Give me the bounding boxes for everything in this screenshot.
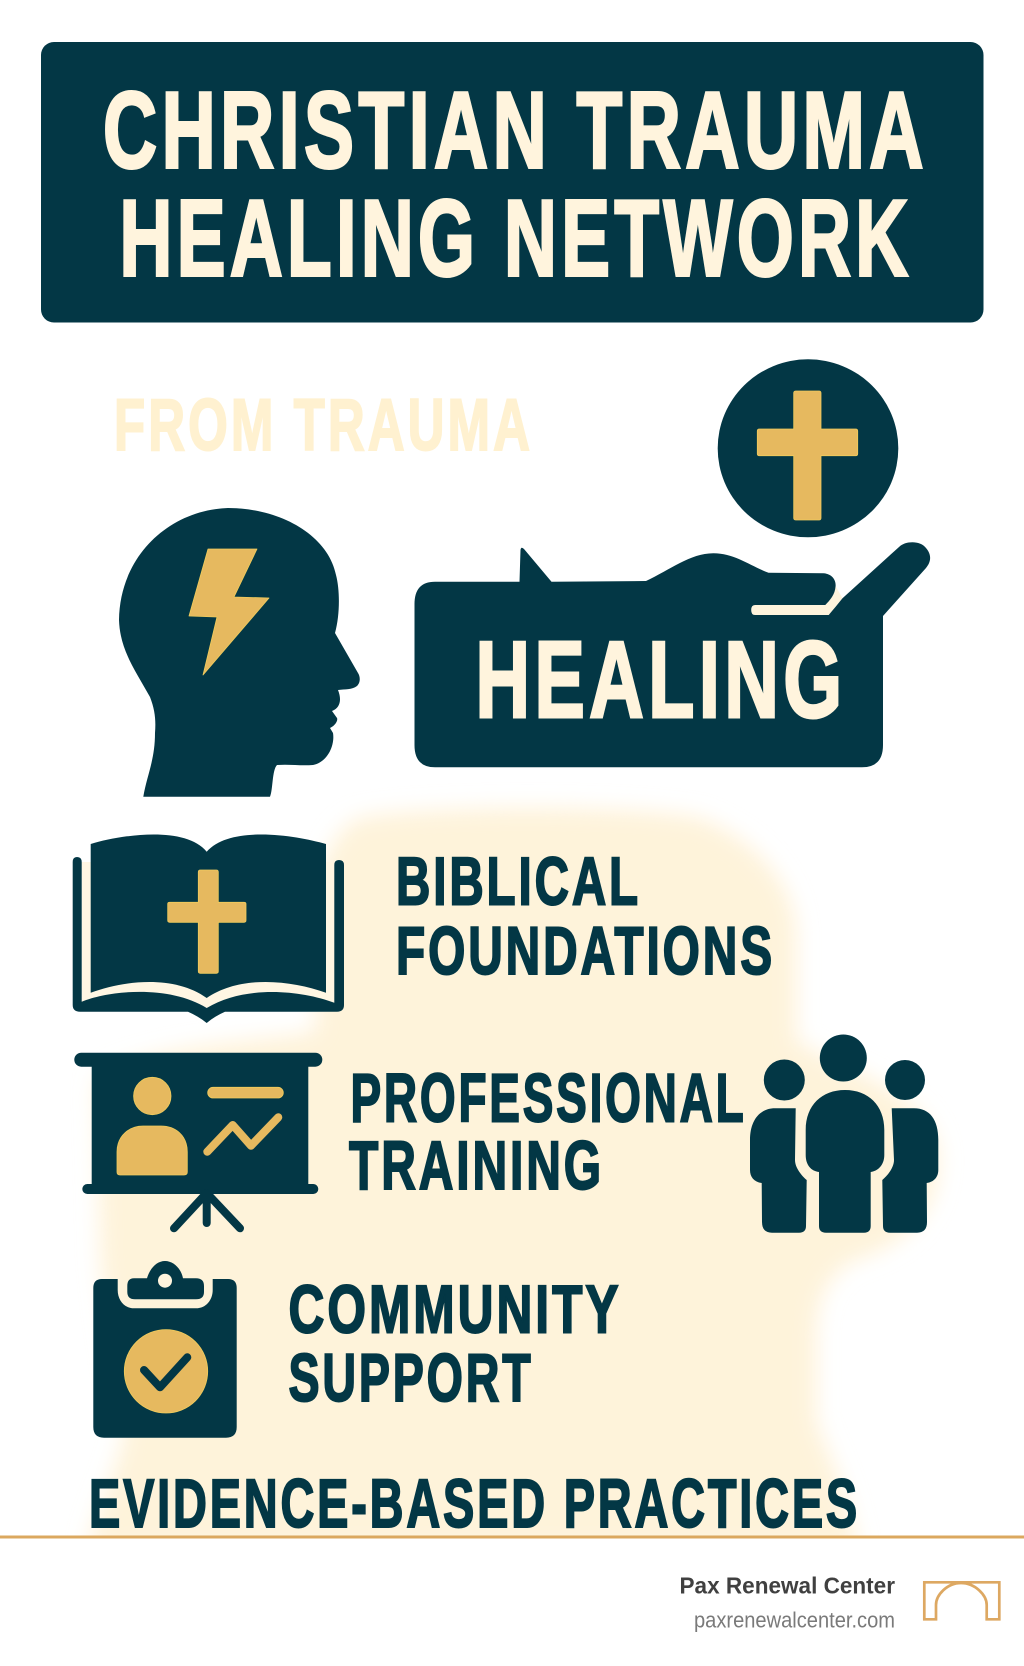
label: from trauma: FROM TRAUMA	[114, 385, 533, 466]
footer: website: paxrenewalcenter.com	[694, 1608, 895, 1632]
label: healing: HEALING	[476, 619, 846, 741]
label: community support: COMMUNITY	[288, 1272, 622, 1348]
title banner	[41, 42, 984, 322]
icon: clipboard with check	[93, 1261, 237, 1438]
label: professional training: TRAINING	[349, 1127, 604, 1204]
footer: arch logo	[924, 1582, 999, 1619]
label: biblical foundations: FOUNDATIONS	[396, 913, 775, 989]
label: biblical foundations	[396, 844, 775, 989]
label: community support	[288, 1272, 622, 1416]
label: professional training	[349, 1060, 746, 1204]
icon: head with lightning bolt	[119, 508, 360, 797]
background: cream head-shaped glow	[88, 808, 938, 1550]
footer divider	[0, 1536, 1024, 1538]
label: community support: SUPPORT	[288, 1340, 534, 1416]
icon: group of people	[750, 1034, 938, 1233]
label: biblical foundations: BIBLICAL	[396, 844, 641, 920]
icon: cross in circle	[718, 359, 898, 537]
label: professional training: PROFESSIONAL	[350, 1060, 746, 1136]
icon: open bible with cross	[73, 834, 344, 1023]
icon: healing hand tray	[414, 542, 930, 767]
footer: brand name: Pax Renewal Center	[680, 1572, 895, 1598]
icon: presentation board	[74, 1053, 322, 1228]
